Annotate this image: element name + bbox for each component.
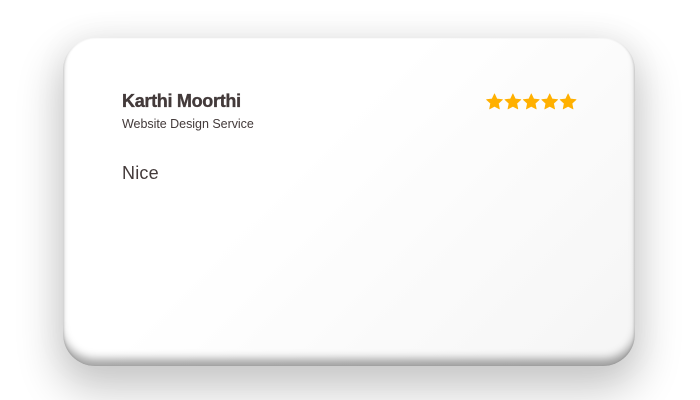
heading: reviewer name: Karthi Moorthi (122, 91, 241, 111)
text: service name: Website Design Service (122, 117, 254, 131)
icon: five star rating (486, 94, 576, 110)
panel: review card (63, 38, 635, 366)
text: review comment: Nice (122, 163, 159, 183)
